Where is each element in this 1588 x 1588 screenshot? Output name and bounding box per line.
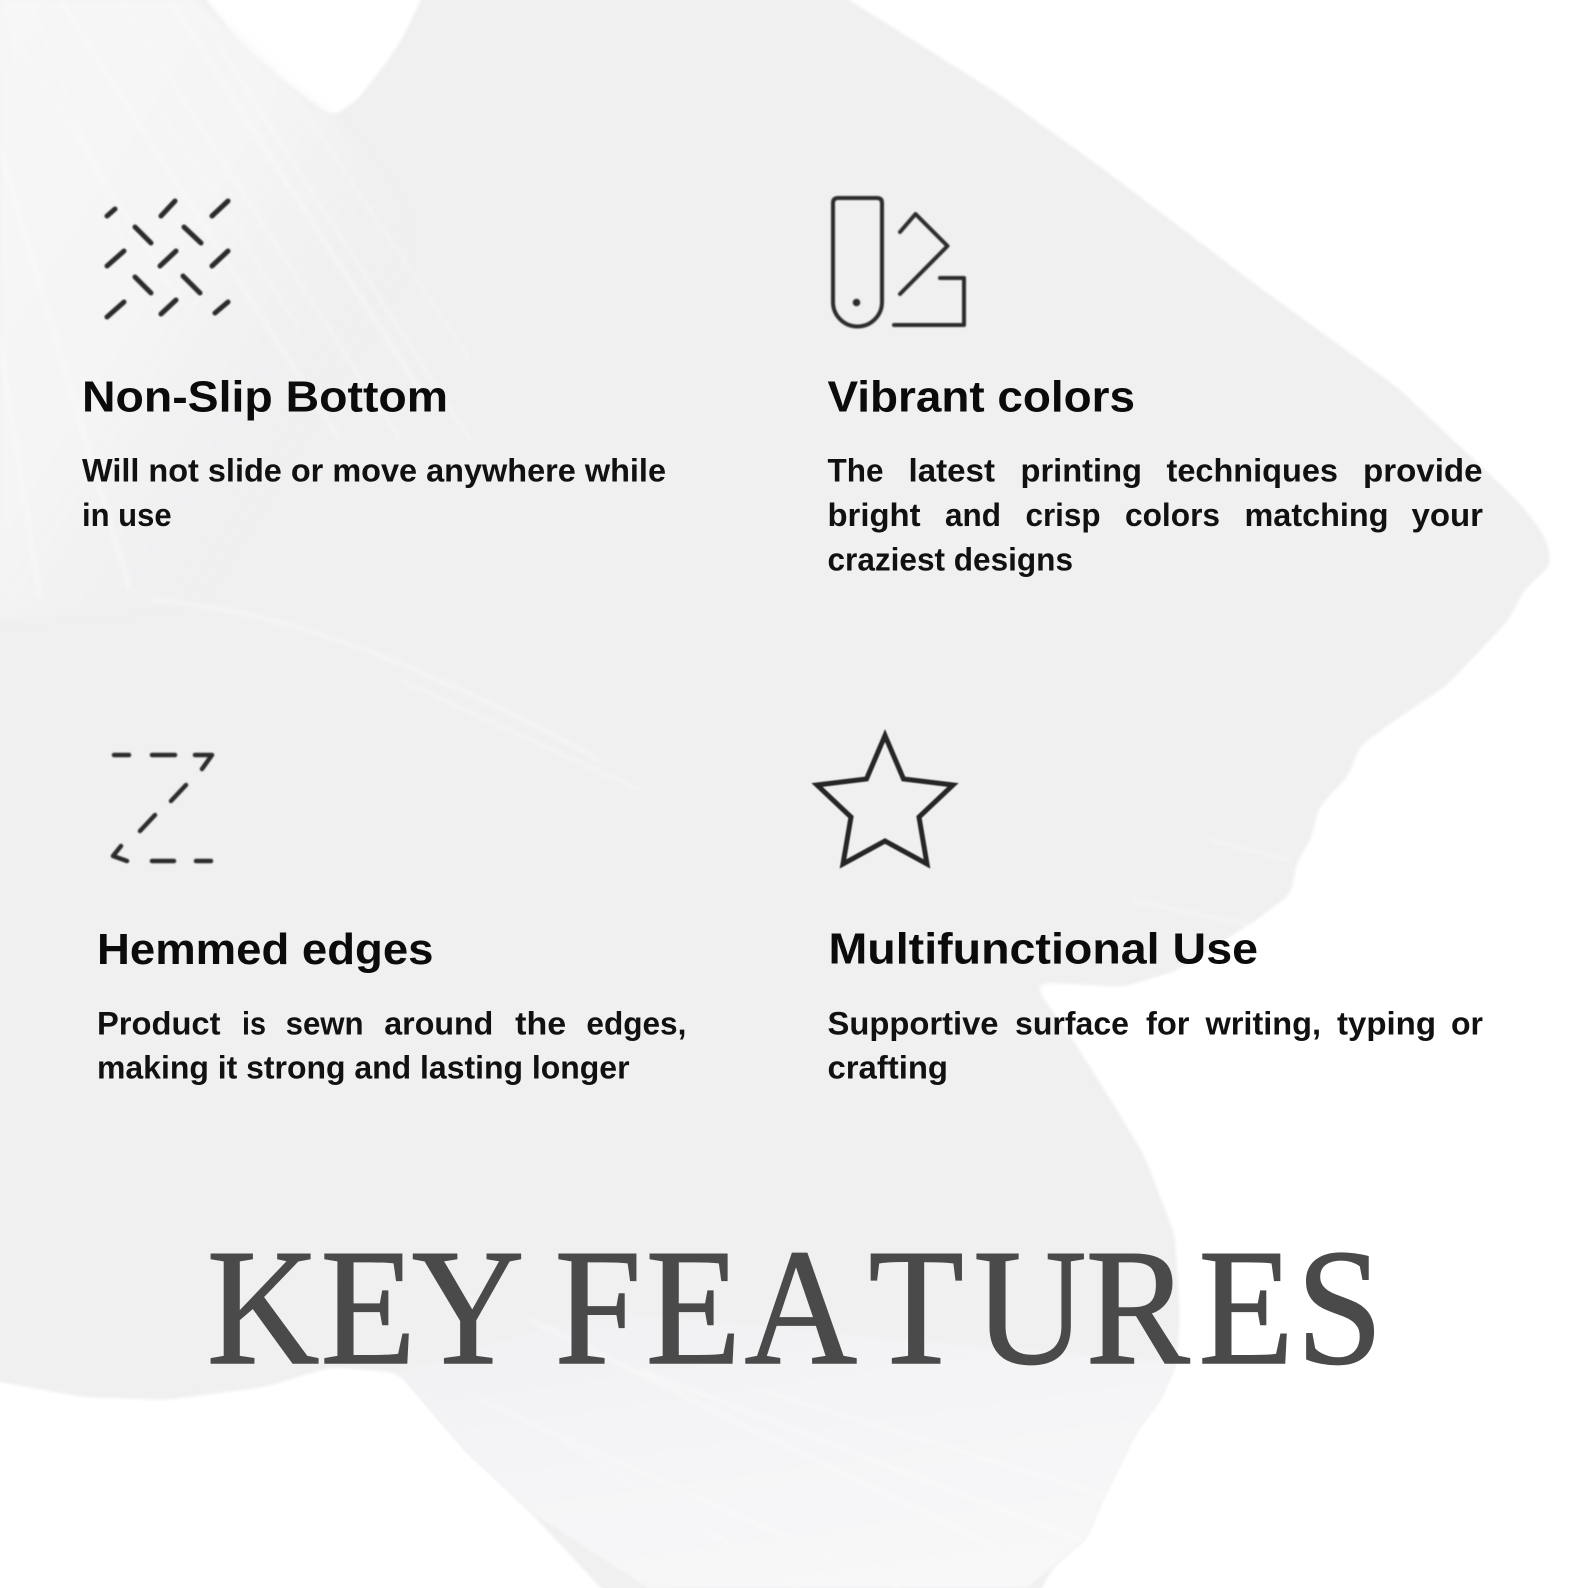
description: sewn	[286, 1005, 364, 1041]
description: printing	[1020, 453, 1142, 489]
description: in use	[82, 497, 172, 533]
description: crisp	[1026, 497, 1100, 533]
feature: Vibrant colors	[828, 198, 1483, 578]
description	[828, 1005, 1483, 1086]
description	[828, 453, 1483, 578]
heading: Vibrant colors	[828, 374, 1135, 422]
description: your	[1412, 497, 1483, 533]
icon: dashed stitch Z	[113, 755, 212, 861]
description: or	[1451, 1005, 1483, 1041]
description: Supportive	[828, 1005, 998, 1041]
description	[82, 453, 666, 533]
description: latest	[908, 453, 995, 489]
description: is	[242, 1005, 266, 1041]
description	[97, 1005, 686, 1086]
description: and	[945, 497, 1001, 533]
description: craziest designs	[828, 542, 1073, 578]
description: crafting	[828, 1050, 948, 1086]
feature: Non-Slip Bottom	[82, 201, 666, 533]
heading: Hemmed edges	[97, 926, 433, 974]
description: edges,	[586, 1005, 686, 1041]
description: colors	[1125, 497, 1220, 533]
description: The	[828, 453, 884, 489]
description: surface	[1015, 1005, 1129, 1041]
heading: Non-Slip Bottom	[82, 374, 448, 422]
heading: Multifunctional Use	[828, 926, 1258, 974]
feature: Multifunctional Use	[817, 736, 1483, 1086]
description: techniques	[1166, 453, 1338, 489]
description: typing	[1337, 1005, 1436, 1041]
description: Will not slide or move anywhere while	[82, 453, 666, 489]
description: matching	[1244, 497, 1388, 533]
title: KEY FEATURES	[207, 1215, 1383, 1399]
icon: non-slip pattern	[107, 201, 228, 317]
description: writing,	[1204, 1005, 1321, 1041]
description: bright	[828, 497, 921, 533]
description: making it strong and lasting longer	[97, 1050, 630, 1086]
description: Product	[97, 1005, 221, 1041]
description: around	[384, 1005, 493, 1041]
feature: Hemmed edges	[97, 755, 686, 1086]
icon: star outline	[817, 736, 953, 864]
description: for	[1146, 1005, 1190, 1041]
description: the	[515, 1005, 566, 1041]
icon: colour swatch	[833, 198, 964, 326]
description: provide	[1363, 453, 1482, 489]
